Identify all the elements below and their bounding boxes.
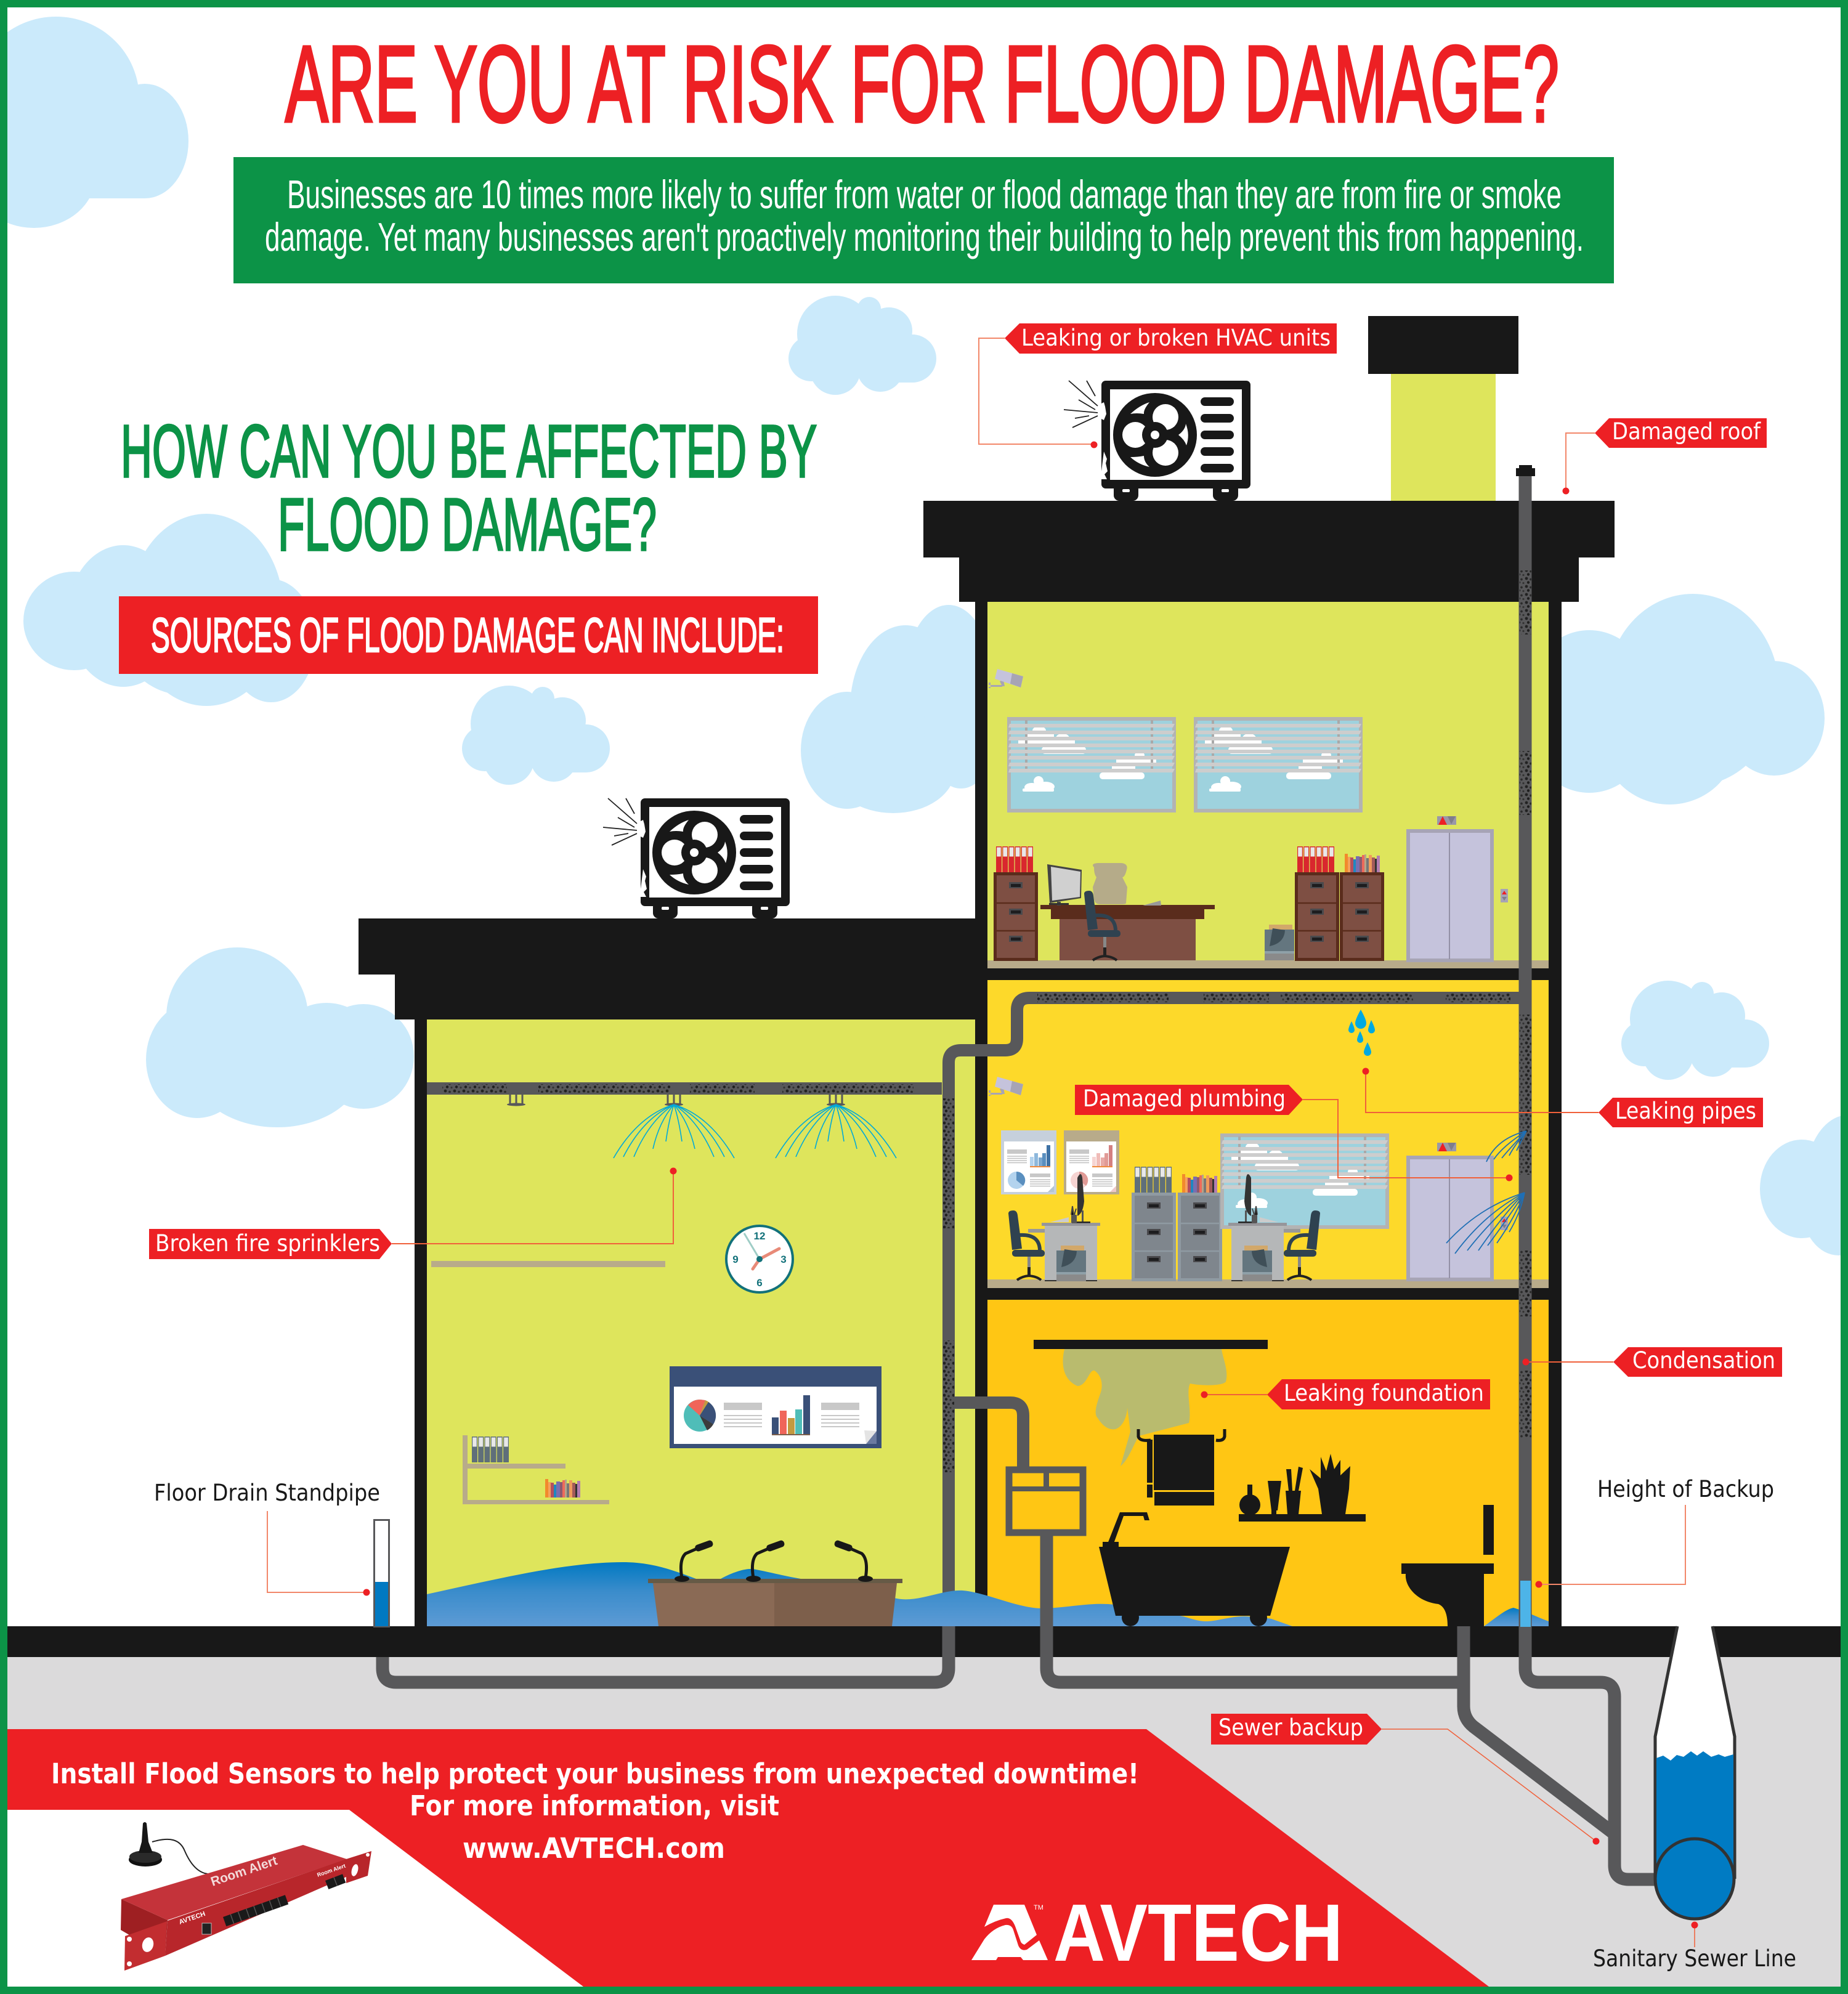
callouts <box>149 323 1796 1972</box>
right ports <box>325 1874 346 1889</box>
desk set left <box>1008 1174 1100 1281</box>
product: room alert sensor <box>121 1822 371 1971</box>
bathtub <box>1099 1512 1290 1626</box>
microphones <box>675 1539 873 1582</box>
callout: broken fire sprinklers: Broken fire sprinklers <box>155 1230 380 1257</box>
wall clock: 6 <box>756 1277 763 1289</box>
elevator <box>1408 831 1492 960</box>
toilet drain line <box>1464 1626 1615 1834</box>
device brand: AVTECH <box>178 1910 206 1926</box>
callout: hvac <box>979 323 1337 448</box>
call to action text: Install Flood Sensors to help protect your business from unexpected downtime! <box>51 1757 1139 1790</box>
callout: sewer backup: Sewer backup <box>1218 1714 1363 1741</box>
cloud: small right <box>1621 981 1769 1080</box>
backup water in pipe <box>1520 1581 1531 1627</box>
callout: condensation <box>1523 1347 1782 1377</box>
room: middle floor <box>987 980 1549 1282</box>
cloud: top left <box>0 17 188 228</box>
filing cabinet left <box>995 873 1037 960</box>
drain line from wing <box>383 1626 949 1682</box>
trademark: TM <box>1034 1904 1044 1911</box>
elevator indicator <box>1437 1143 1456 1151</box>
cloud: small left center <box>462 686 610 785</box>
red binders right <box>1297 846 1334 872</box>
callout: broken fire sprinklers <box>149 1168 676 1259</box>
red binders left <box>996 846 1033 872</box>
water drops <box>1348 1010 1375 1056</box>
bar chart <box>772 1395 810 1435</box>
books on shelf <box>545 1479 580 1498</box>
call to action text <box>51 1757 1139 1865</box>
elevator button <box>1501 889 1508 902</box>
ground slab <box>7 1626 1841 1657</box>
wall shelf with toiletries <box>1239 1454 1366 1522</box>
sensor ports <box>223 1895 288 1926</box>
callout: leaking foundation <box>1201 1379 1490 1409</box>
call to action text: www.AVTECH.com <box>463 1832 725 1865</box>
cloud: right of main tower <box>1522 594 1825 804</box>
wall clock: 9 <box>732 1254 739 1265</box>
building structure <box>359 501 1615 1626</box>
room: wing <box>427 1019 975 1626</box>
sprinkler left <box>614 1091 734 1158</box>
room: basement <box>987 1300 1549 1626</box>
call to action panel <box>7 1729 1489 1987</box>
flood water <box>427 1562 1292 1626</box>
sources banner: SOURCES OF FLOOD DAMAGE CAN INCLUDE: <box>151 607 784 662</box>
callout: height of backup <box>1535 1476 1774 1588</box>
intro text <box>265 172 1584 259</box>
gray binders <box>1135 1167 1172 1193</box>
wing standpipe riser <box>949 998 1522 1626</box>
basement junction box and pipe <box>1009 1470 1464 1682</box>
elevator <box>1408 1157 1492 1279</box>
callout: damaged plumbing <box>1075 1085 1513 1181</box>
cloud: left of wing <box>146 947 414 1127</box>
pie chart <box>684 1400 716 1432</box>
callout: sewer backup <box>1211 1714 1599 1844</box>
callout: condensation: Condensation <box>1632 1347 1775 1374</box>
callout: damaged roof: Damaged roof <box>1612 418 1761 445</box>
callout: leaking pipes: Leaking pipes <box>1615 1098 1756 1124</box>
callout: damaged roof <box>1562 418 1767 494</box>
heading: how can you be affected <box>121 409 817 566</box>
toilet <box>1401 1505 1494 1626</box>
callout: floor drain standpipe <box>154 1480 380 1595</box>
basement shelf <box>1034 1340 1268 1349</box>
security camera <box>989 669 1023 688</box>
intro panel <box>233 157 1614 283</box>
executive desk <box>1040 863 1215 960</box>
security camera <box>989 1077 1023 1096</box>
books <box>1345 854 1380 872</box>
callout: sanitary sewer line: Sanitary Sewer Line <box>1593 1945 1796 1972</box>
wall clock <box>726 1226 793 1292</box>
avtech wordmark: AVTECH <box>1053 1887 1343 1978</box>
wall clock: 3 <box>780 1254 787 1265</box>
towel rack <box>1138 1429 1225 1506</box>
branch pipe to basement box <box>949 1403 1023 1467</box>
filing cabinets right <box>1296 873 1383 960</box>
top floor furniture <box>989 669 1508 960</box>
wall clock: 12 <box>754 1230 765 1242</box>
avtech logo mark <box>971 1905 1048 1960</box>
poster: blue chart <box>1001 1130 1056 1194</box>
callout: leaking pipes <box>1363 1068 1763 1127</box>
device side label: Room Alert <box>316 1863 346 1878</box>
heading: how can you be affected: HOW CAN YOU BE AFFECTED BY <box>121 409 817 493</box>
sprinkler right <box>776 1091 896 1158</box>
network port <box>202 1923 211 1934</box>
cloud: behind sources banner <box>23 514 315 706</box>
gray filing cabinets <box>1133 1194 1221 1280</box>
antenna <box>129 1822 208 1874</box>
device body <box>121 1845 371 1971</box>
waste bin <box>1265 925 1294 960</box>
wing furniture <box>431 1091 896 1504</box>
rust on pipes and wing pipes <box>427 998 1522 1626</box>
desk set right <box>1228 1174 1320 1281</box>
callout: hvac: Leaking or broken HVAC units <box>1021 325 1331 351</box>
books <box>1182 1174 1217 1193</box>
pipe corrosion <box>442 570 1531 1472</box>
elevator indicator <box>1437 816 1456 825</box>
callout: sanitary sewer line <box>1593 1922 1796 1972</box>
cloud: right edge <box>1760 1115 1848 1255</box>
window right <box>1195 719 1361 811</box>
middle floor furniture <box>989 1077 1508 1281</box>
room: top floor <box>987 602 1549 960</box>
callout: floor drain standpipe: Floor Drain Standpipe <box>154 1480 380 1506</box>
leak spray upper <box>1486 1131 1526 1162</box>
floor drain standpipe gauge <box>375 1520 389 1626</box>
window <box>1222 1135 1388 1227</box>
hvac unit: main roof <box>1064 381 1250 501</box>
sewer line tank <box>1655 1626 1735 1919</box>
callout: leaking foundation: Leaking foundation <box>1284 1380 1484 1406</box>
cloud: small upper center <box>788 296 936 395</box>
office chair <box>1084 891 1121 960</box>
floor slab: top floor <box>987 960 1549 968</box>
cloud: left of main tower <box>801 605 998 813</box>
binders on shelf <box>472 1437 509 1462</box>
shelves <box>463 1435 609 1504</box>
leak spray lower <box>1446 1193 1525 1254</box>
call to action text: For more information, visit <box>410 1789 779 1822</box>
flood water right corner <box>1484 1608 1549 1626</box>
poster: red chart <box>1064 1130 1119 1194</box>
sprinkler pipe <box>427 1082 942 1095</box>
wall rail <box>431 1261 665 1267</box>
main vertical pipe <box>1516 465 1660 1879</box>
device label: Room Alert <box>209 1854 279 1889</box>
elevator button <box>1501 1217 1508 1230</box>
soil <box>7 1657 1841 1987</box>
heading: how can you be affected: FLOOD DAMAGE? <box>278 482 657 566</box>
basement stain <box>1063 1349 1226 1466</box>
product background <box>7 1810 583 1987</box>
callout: height of backup: Height of Backup <box>1597 1476 1774 1502</box>
conference podium <box>648 1539 902 1626</box>
presentation board <box>670 1366 881 1448</box>
sprinkler head <box>507 1091 525 1106</box>
window left <box>1008 719 1175 811</box>
floor slab: middle floor <box>987 1279 1549 1288</box>
callout: damaged plumbing: Damaged plumbing <box>1083 1085 1286 1112</box>
hvac unit: wing roof <box>603 798 790 918</box>
sources banner <box>119 596 818 674</box>
chimney <box>1368 316 1518 501</box>
